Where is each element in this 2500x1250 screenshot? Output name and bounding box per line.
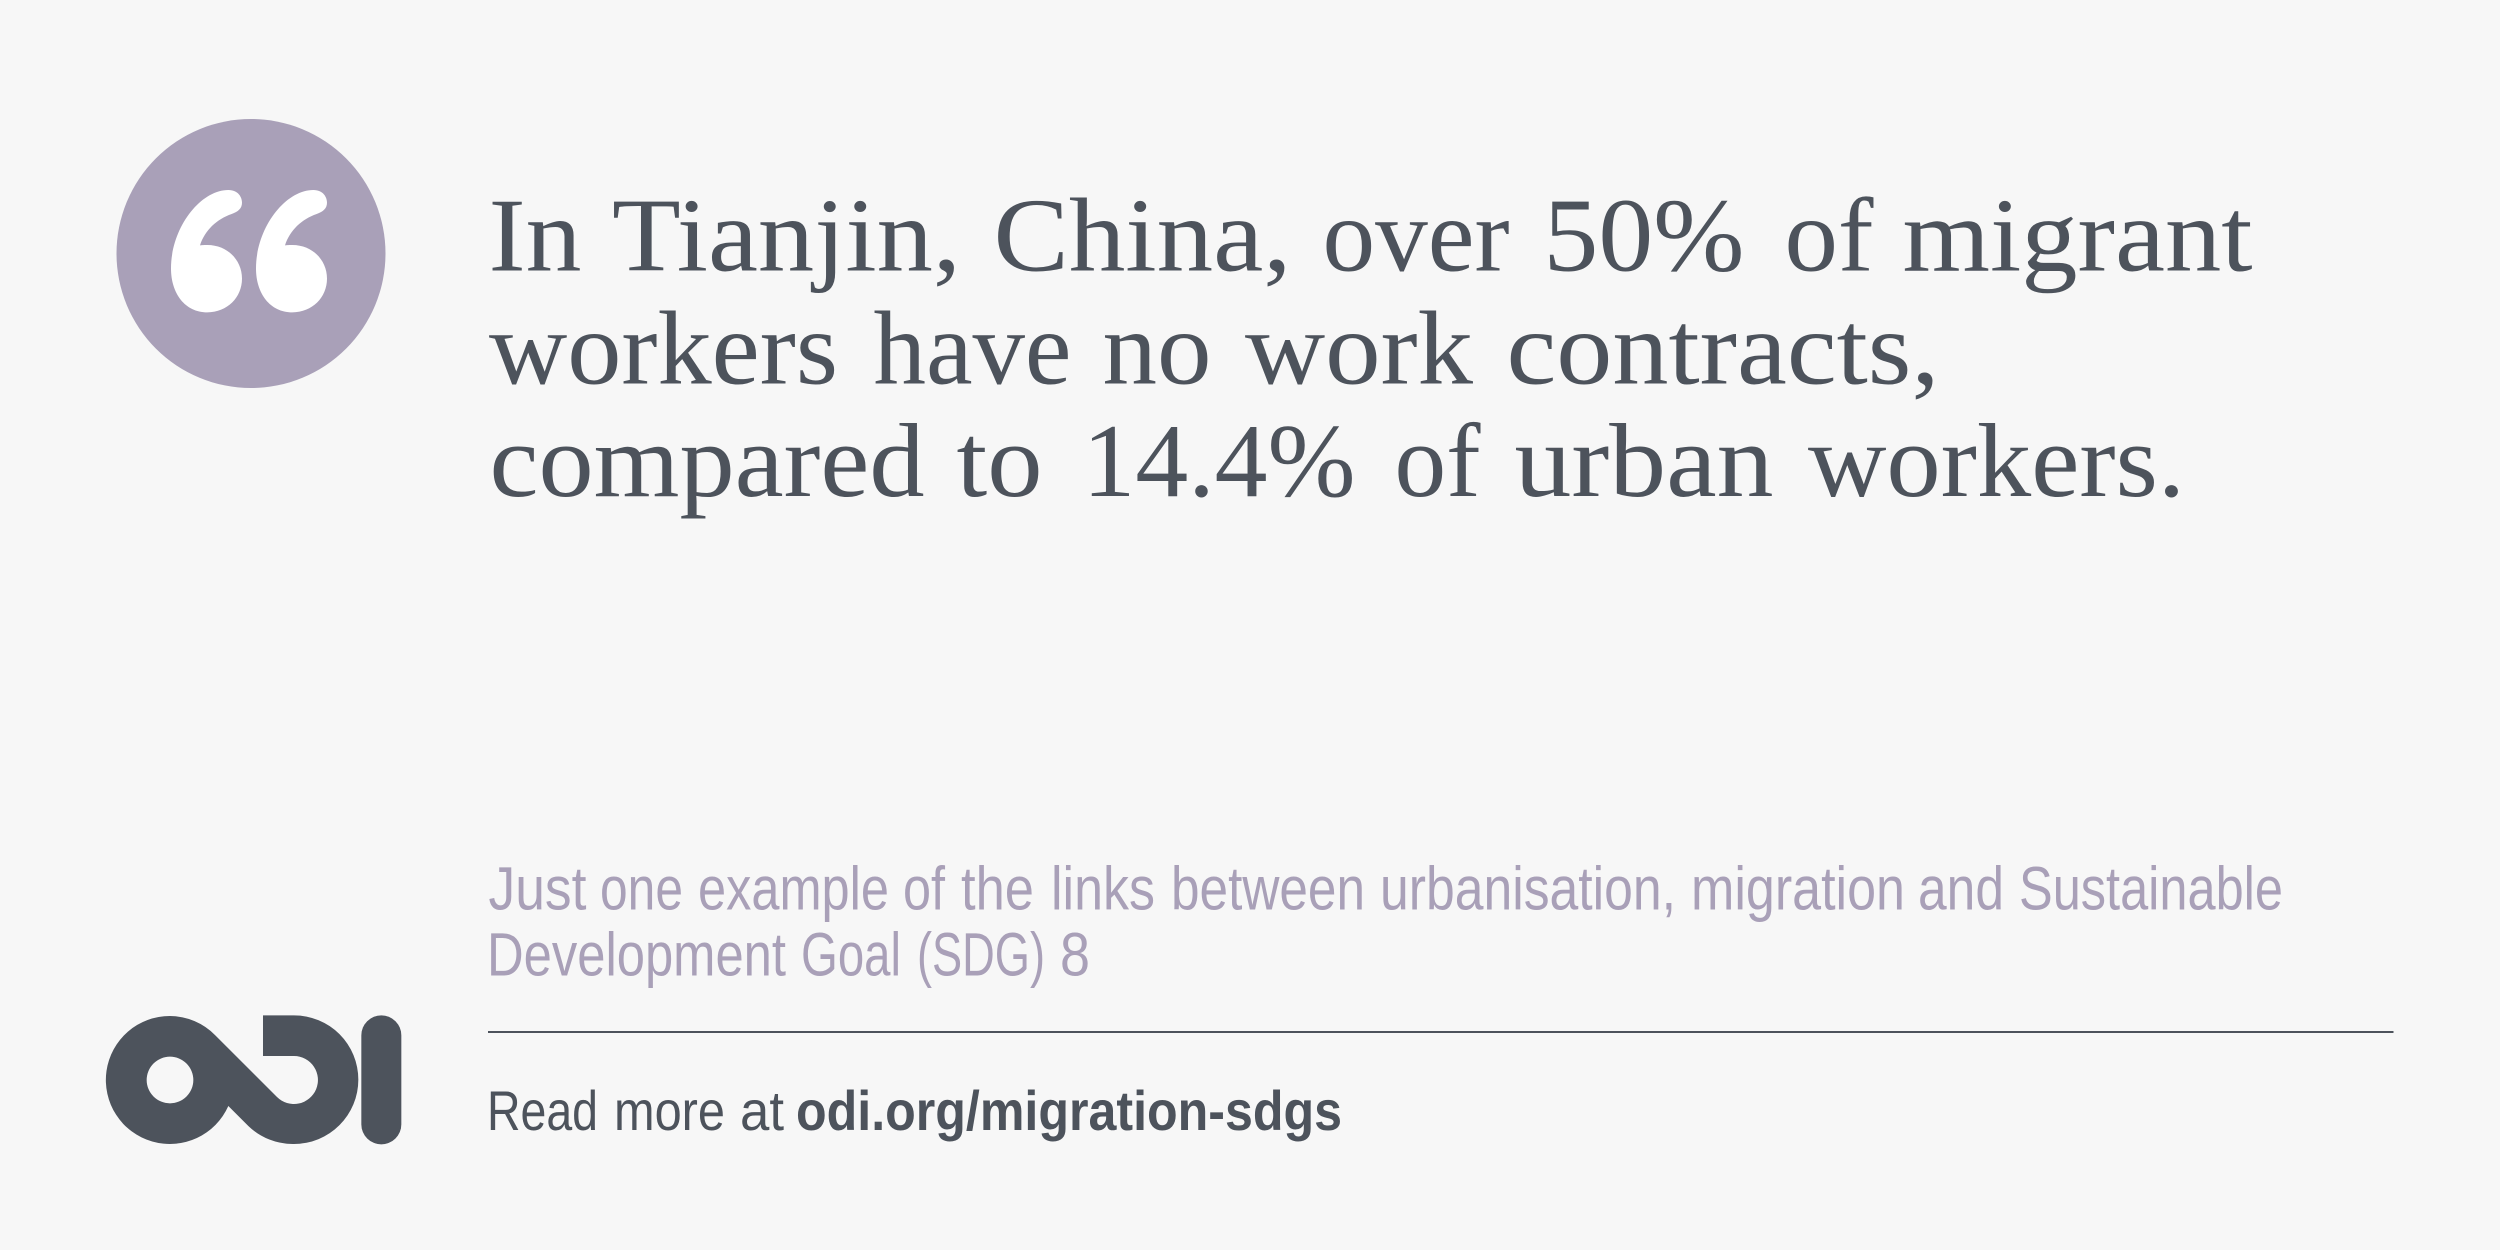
quote text [488, 177, 2252, 519]
quote line 1: 50% [1544, 177, 1744, 294]
read more link text [487, 1079, 1342, 1142]
read more link text: Read [487, 1079, 598, 1142]
quote line 1: of [1784, 177, 1874, 294]
read more link text: more [614, 1079, 725, 1142]
quote line 3: to [956, 402, 1042, 519]
quote line 2: have [874, 289, 1072, 406]
quote line 1: In [488, 177, 582, 294]
subtitle line 1: of [903, 854, 946, 922]
subtitle line 2: Development [487, 920, 786, 988]
quote line 3: of [1394, 402, 1481, 519]
quote line 3: 14.4% [1082, 402, 1356, 519]
subtitle line 1: migration [1691, 854, 1905, 922]
quote line 3: compared [490, 402, 924, 519]
quote line 2: work [1245, 289, 1474, 406]
logo: ODI [106, 1015, 401, 1144]
subtitle line 1: and [1918, 854, 2004, 922]
subtitle line 1: links [1051, 854, 1155, 922]
read more link text: odi.org/migration-sdgs [796, 1079, 1342, 1142]
quote line 2 [489, 289, 1940, 406]
subtitle text [487, 854, 2283, 988]
subtitle line 1: between [1171, 854, 1365, 922]
quote line 1 [488, 177, 2252, 294]
subtitle line 1: Sustainable [2019, 854, 2283, 922]
subtitle line 1: the [961, 854, 1034, 922]
subtitle line 1: example [698, 854, 889, 922]
quote line 2: contracts, [1506, 289, 1940, 406]
subtitle line 2: Goal [801, 920, 901, 988]
quote line 1: over [1322, 177, 1510, 294]
subtitle line 2: 8 [1060, 920, 1090, 988]
subtitle line 1: one [600, 854, 683, 922]
quote line 3 [490, 402, 2185, 519]
subtitle line 1: Just [488, 854, 587, 922]
quote line 2: no [1102, 289, 1212, 406]
read more link text: at [740, 1079, 784, 1142]
quote line 3: urban [1514, 402, 1774, 519]
subtitle line 2 [487, 920, 1090, 988]
subtitle line 1 [488, 854, 2283, 922]
subtitle line 1: urbanisation, [1380, 854, 1676, 922]
quote line 1: migrant [1902, 177, 2252, 294]
quote line 1: China, [994, 177, 1292, 294]
subtitle line 2: (SDG) [917, 920, 1045, 988]
quote line 1: Tianjin, [612, 177, 961, 294]
quote line 2: workers [489, 289, 838, 406]
quote line 3: workers. [1808, 402, 2185, 519]
icon: quotation marks in purple circle [116, 119, 386, 388]
